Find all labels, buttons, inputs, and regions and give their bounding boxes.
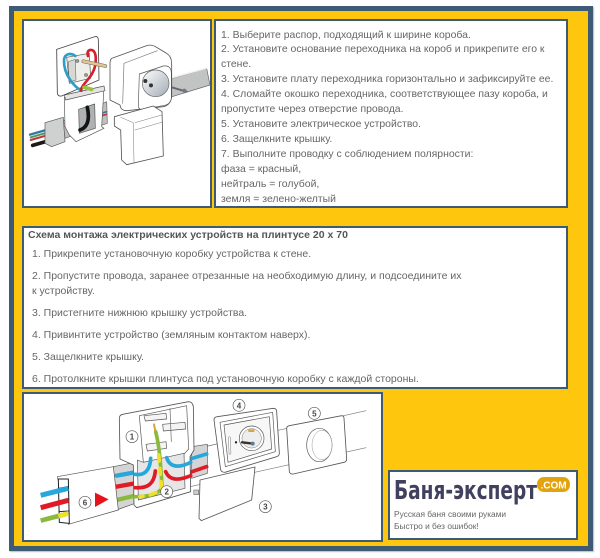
logo tagline: Быстро и без ошибок! [394, 521, 479, 531]
left duct interior and wires [113, 462, 135, 510]
logo tagline: Русская баня своими руками [394, 509, 506, 519]
socket plate [214, 408, 279, 472]
step 2: к устройству. [32, 285, 95, 297]
cover [114, 106, 163, 165]
instruction lines [221, 30, 553, 205]
step 2: 2. Пропустите провода, заранее отрезанные на необходимую длину, и подсоедините их [32, 270, 461, 282]
number markers: 3 [263, 503, 268, 512]
box wires [135, 458, 151, 475]
instruction lines: 4. Сломайте окошко переходника, соответствующее пазу короба, и [221, 89, 548, 100]
red wire [81, 50, 96, 91]
instruction lines: фаза = красный, [221, 164, 301, 175]
number markers: 4 [237, 401, 242, 410]
number markers: 1 [130, 433, 135, 442]
panel: adapter illustration [22, 19, 212, 208]
panel: baseboard illustration [22, 392, 383, 542]
number markers: 5 [312, 409, 317, 418]
step 3: 3. Пристегните нижнюю крышку устройства. [32, 307, 247, 319]
instruction lines: 1. Выберите распор, подходящий к ширине короба. [221, 30, 471, 40]
scheme heading: Схема монтажа электрических устройств на плинтусе 20 х 70 [28, 229, 348, 241]
peg [83, 61, 105, 66]
instruction lines: 7. Выполните проводку с соблюдением полярности: [221, 149, 473, 160]
instruction lines: земля = зелено-желтый [221, 194, 336, 205]
number markers: 2 [164, 488, 169, 497]
step 5: 5. Защелкните крышку. [32, 351, 144, 363]
step 6: 6. Протолкните крышки плинтуса под установочную коробку с каждой стороны. [32, 373, 419, 385]
earth wire [84, 87, 92, 89]
instruction lines: 3. Установите плату переходника горизонтально и зафиксируйте ее. [221, 74, 553, 85]
instruction lines: 6. Защелкните крышку. [221, 134, 332, 145]
cover 5 [287, 416, 347, 474]
instruction lines: пропустите через отверстие провода. [221, 104, 404, 115]
instruction lines: стене. [221, 59, 251, 70]
cap 6 [57, 467, 118, 524]
step 2 [32, 270, 462, 297]
duct [190, 411, 366, 487]
logo tagline [394, 509, 506, 531]
socket body [110, 45, 172, 111]
cover 3 [199, 467, 255, 521]
panel: mounting scheme text [22, 226, 568, 389]
adapter column [64, 87, 104, 142]
duct right [167, 68, 210, 98]
number markers: 6 [83, 498, 88, 507]
number markers [79, 399, 320, 513]
logo wordmark: .COM [540, 480, 567, 492]
panel: instructions text [214, 19, 568, 208]
screw [182, 89, 186, 93]
step 1: 1. Прикрепите установочную коробку устройства к стене. [32, 248, 311, 260]
base box [119, 402, 194, 508]
instruction lines: нейтраль = голубой, [221, 179, 319, 190]
step 4: 4. Привинтите устройство (земляным контактом наверх). [32, 329, 310, 341]
blue wire [64, 54, 82, 91]
instruction lines: 2. Установите основание переходника на короб и прикрепите его к [221, 44, 544, 55]
duct left and wires [30, 123, 72, 135]
panel: site logo [388, 470, 578, 540]
instruction lines: 5. Установите электрическое устройство. [221, 119, 421, 130]
red arrow [95, 493, 109, 507]
wall plate [57, 37, 99, 96]
